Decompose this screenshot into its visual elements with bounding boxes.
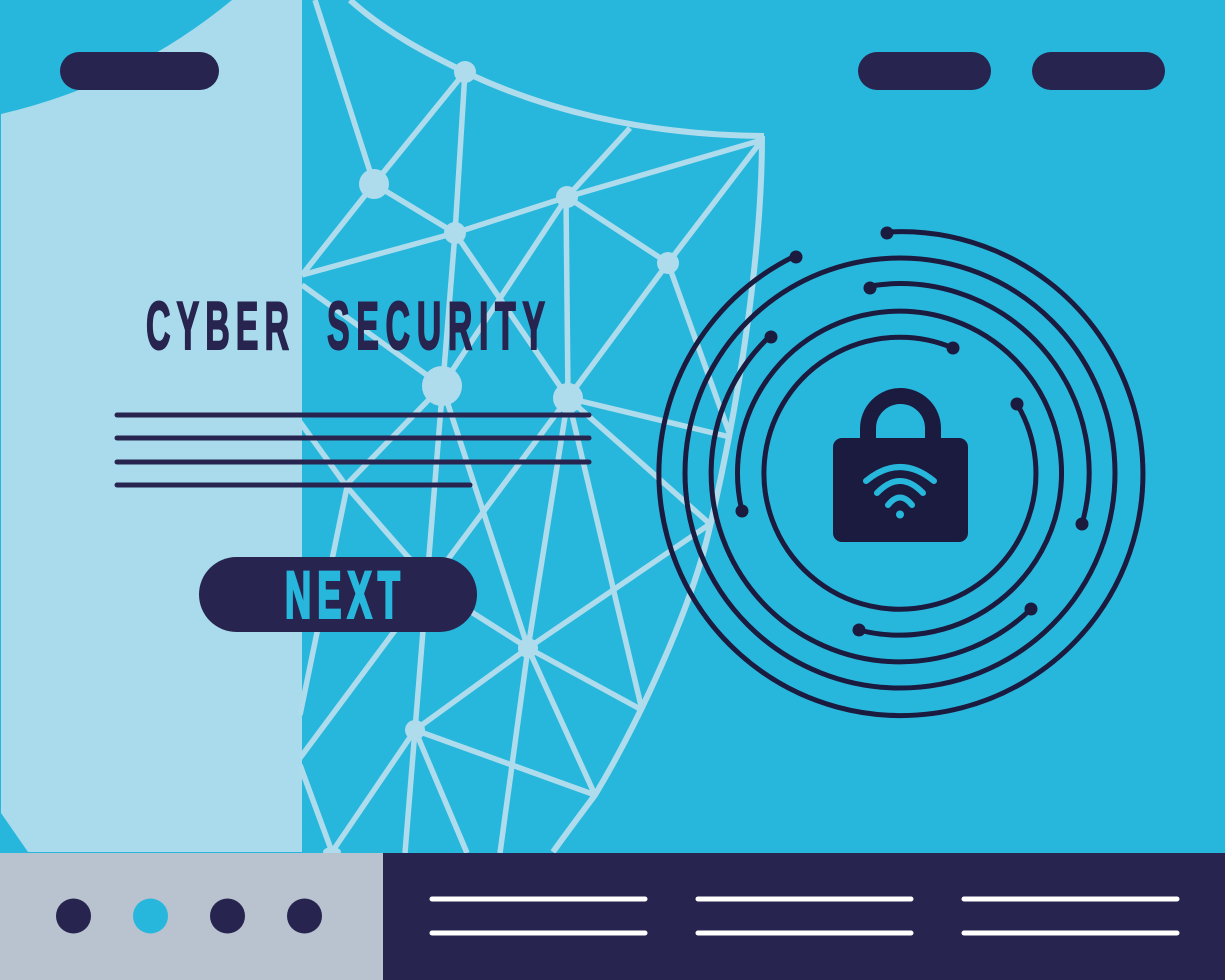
network nodes [323,61,679,857]
ring arc top right [870,284,1089,524]
top right nav pill one [858,52,991,90]
outer ring arc [659,232,1143,716]
shield outline [350,0,764,852]
inner ring arc [738,311,1062,635]
top left nav pill [60,52,219,90]
title: CYBER [146,288,295,364]
footer text placeholder lines [432,899,1177,933]
body text placeholder lines [117,415,589,485]
ring arc bottom left [711,336,1031,662]
icon: wifi symbol [866,467,934,518]
full ring [685,258,1115,688]
shield network mesh [300,0,764,857]
panel: footer left grey [0,853,383,980]
next button [199,557,477,632]
pagination dots [56,898,322,934]
innermost ring arc [764,337,1036,609]
title [146,288,552,364]
icon: padlock with wifi [833,396,968,542]
top right nav pill two [1032,52,1165,90]
panel: light blue left panel [1,0,302,852]
network edges [300,0,762,853]
panel: footer right dark [383,853,1225,980]
next label: NEXT [285,559,406,632]
ring end dots [736,226,1088,636]
title: SECURITY [327,288,552,364]
circuit rings around lock [659,226,1143,716]
